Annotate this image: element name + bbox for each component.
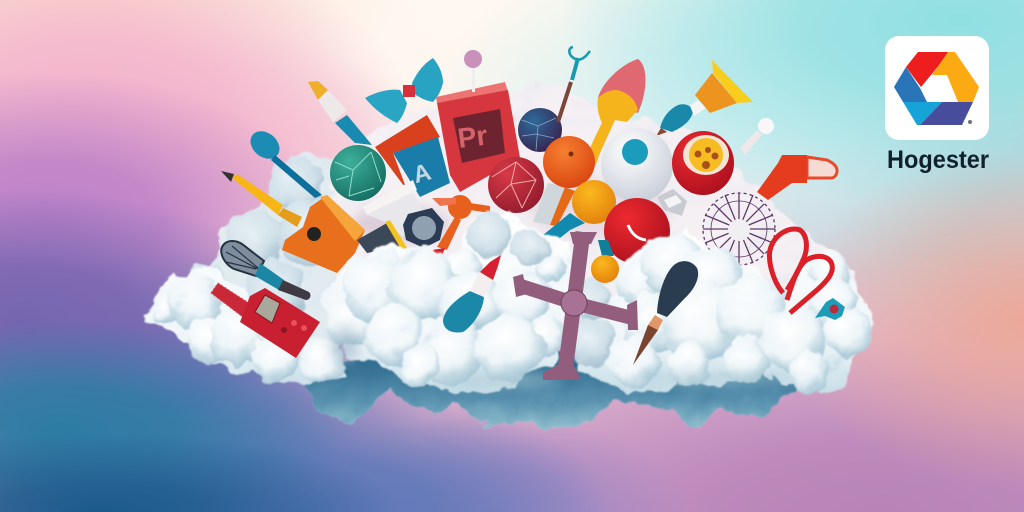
cloud: front lobes	[140, 213, 873, 393]
logo: wordmark: Hogester	[887, 146, 989, 174]
ball: small yellow	[591, 240, 619, 283]
tool: yellow pencil	[221, 171, 302, 227]
tool: red radio device	[211, 283, 320, 358]
ball: yellow and teal handle	[543, 180, 616, 242]
tool: orange folded device	[282, 195, 365, 273]
cloud: back puffs	[160, 85, 860, 365]
tool: dark gear ring	[357, 208, 444, 253]
tool: white knob	[740, 118, 774, 155]
ball: glossy red	[604, 198, 670, 264]
ball: white with teal dial	[601, 128, 673, 202]
tool: teal and yellow broom	[656, 60, 753, 136]
cloud: shade behind tools	[350, 180, 670, 245]
logo: hexagon mark	[894, 52, 979, 125]
tool: red scissors	[770, 229, 832, 313]
tool: teal lipstick brush	[443, 255, 501, 332]
tool: red ring with yellow centre	[672, 131, 734, 195]
icon: spoked wheel	[703, 193, 775, 265]
icon: teal butterfly bow	[365, 58, 443, 123]
icon: Pr red box	[436, 50, 520, 192]
icon: Pr red box: Pr	[456, 120, 489, 154]
tool: orange clip	[432, 195, 490, 265]
tool: cream and teal marker	[308, 81, 372, 145]
cloud: shadowed underside	[295, 345, 805, 430]
tool: orange face ball and chrome stem	[533, 136, 595, 226]
tool: red hair dryer	[757, 155, 837, 200]
tool: pink and yellow mushroom brush	[588, 59, 646, 167]
icon: A orange box: A	[410, 158, 434, 189]
tool: mauve cross wrench	[513, 232, 638, 380]
tool: hook stick	[558, 47, 590, 122]
ball: teal globe	[330, 145, 386, 201]
logo: Hogester app tile	[885, 36, 989, 174]
tool: chrome clip	[657, 189, 687, 216]
icon: small teal tag	[815, 298, 845, 320]
tool: whisk	[221, 241, 310, 300]
tool: blue spoon brush	[245, 126, 322, 198]
ball: navy pattern	[518, 108, 562, 152]
ball: red wire	[488, 157, 544, 213]
tool: white jar	[363, 180, 423, 237]
tool: dark makeup brush	[633, 261, 698, 365]
icon: A orange box	[375, 115, 450, 197]
cloud: soft shading	[331, 327, 800, 387]
